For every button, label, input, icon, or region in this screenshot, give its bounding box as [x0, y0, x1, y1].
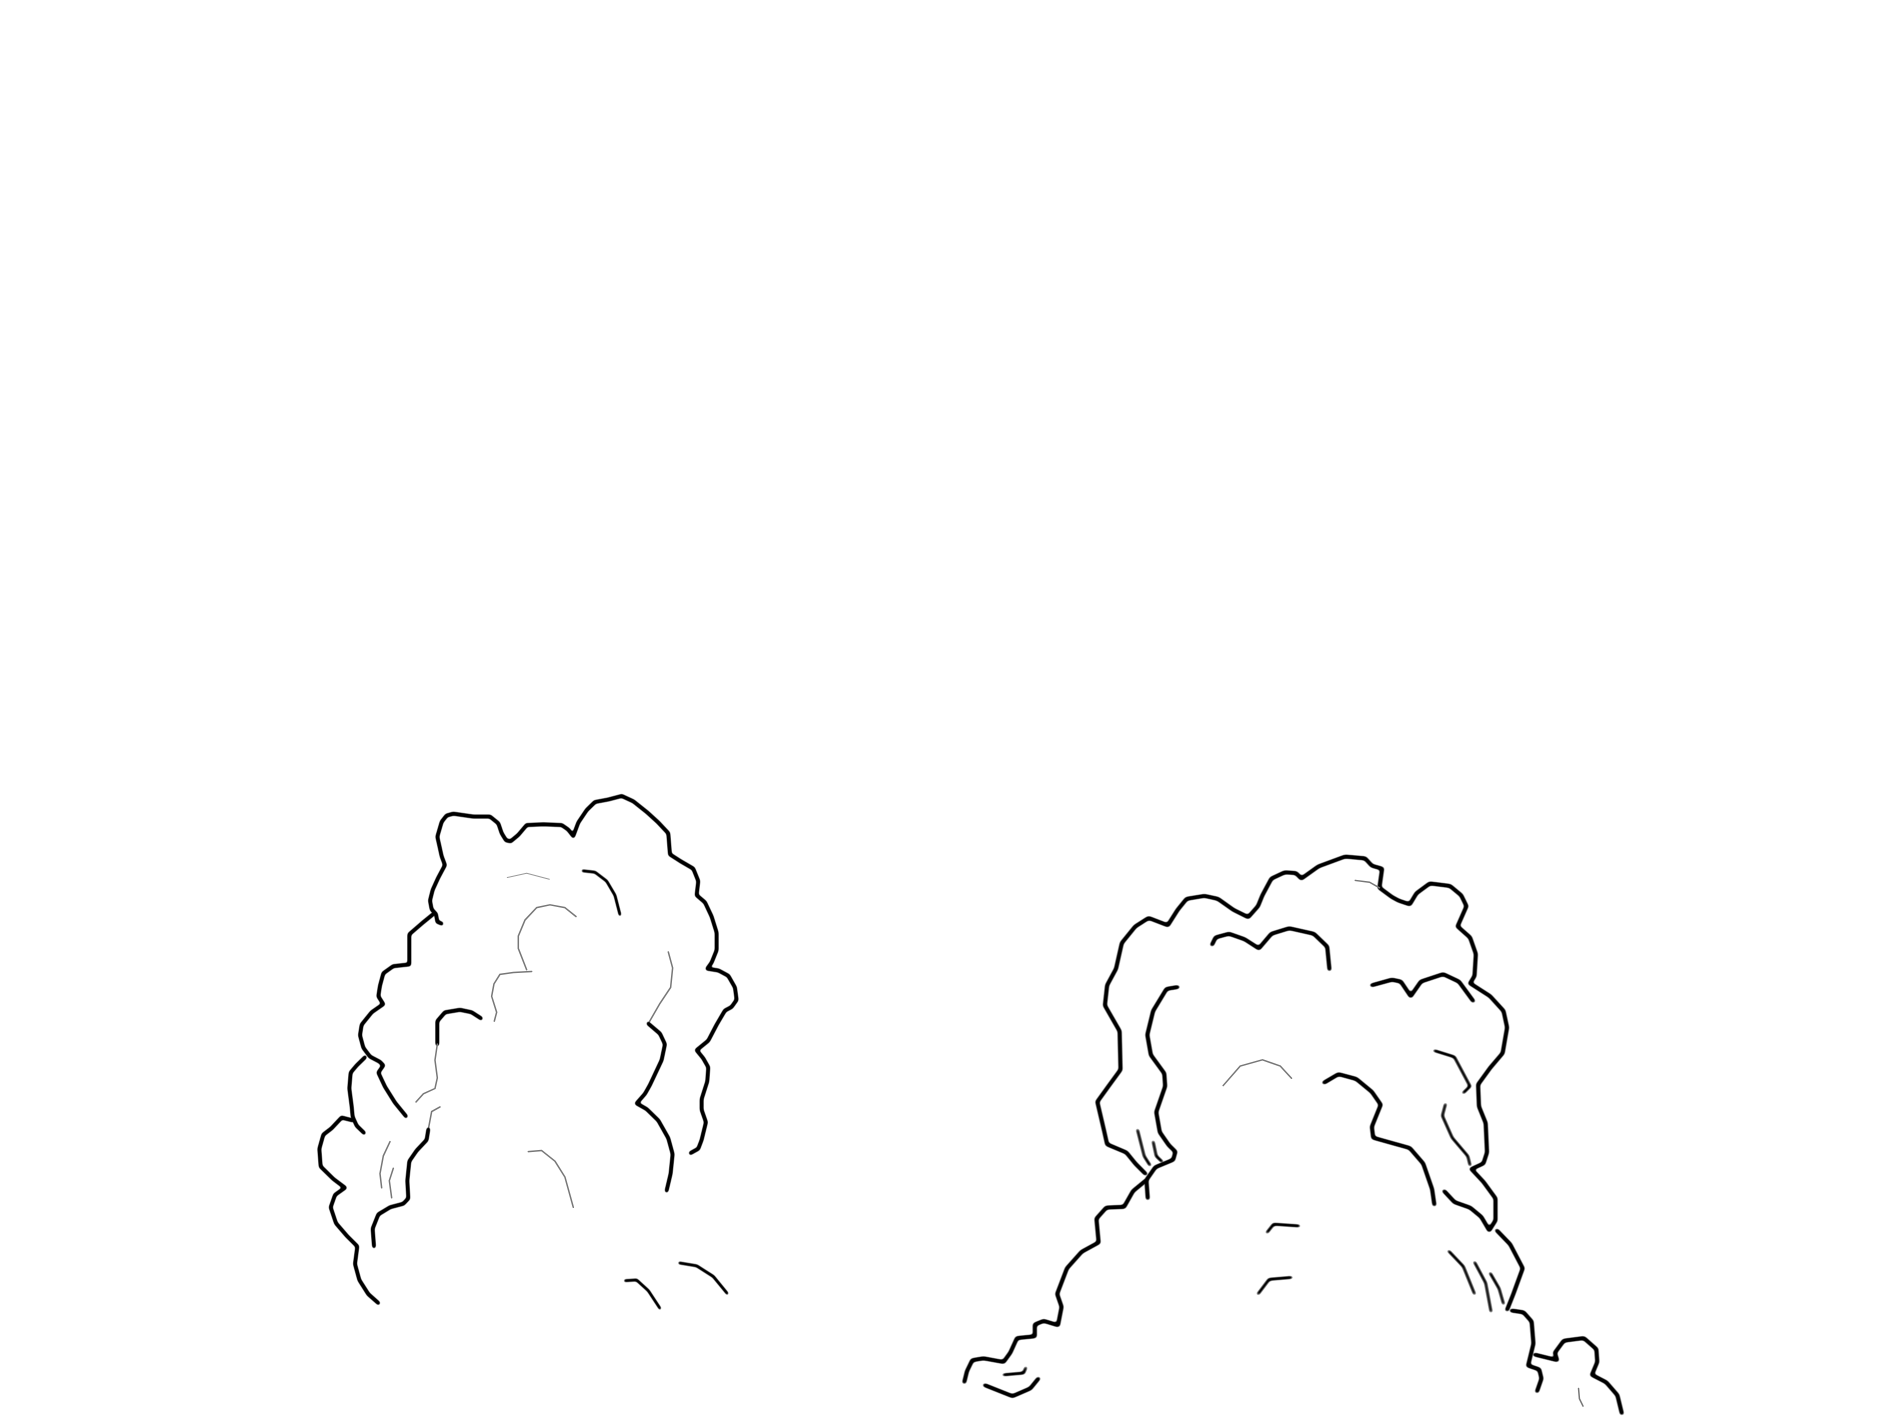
right cloud: right slope	[1497, 1230, 1523, 1310]
left cloud: top faint arc	[507, 873, 549, 879]
left cloud: bottom arcs	[625, 1263, 727, 1308]
right cloud: inner left fold	[1146, 987, 1178, 1198]
left cloud: top right arc	[583, 871, 620, 915]
right cloud: small puff	[1535, 1338, 1622, 1413]
right cloud: base stroke	[985, 1379, 1038, 1396]
left cloud: inner billow	[437, 1010, 481, 1044]
right cloud: small top and puff strokes	[1355, 880, 1583, 1406]
left cloud: upper outline	[430, 796, 737, 1153]
right cloud: base wisp	[1004, 1368, 1026, 1375]
left cloud: central billow arc	[492, 905, 576, 1021]
left cloud: side lobe	[349, 1057, 365, 1133]
right cloud: main outline	[1097, 857, 1507, 1230]
right cloud: centre small arcs	[1258, 1224, 1299, 1294]
left cloud: shading hairlines	[380, 1142, 393, 1198]
left cloud: left shoulder outline	[360, 914, 433, 1116]
right cloud: lower right hairlines	[1449, 1251, 1504, 1312]
right cloud: right billow	[1372, 974, 1473, 1001]
left cloud: inner fold top	[428, 1107, 440, 1129]
right cloud: upper inner billow	[1212, 928, 1329, 969]
right cloud: crease hairlines	[1137, 1130, 1162, 1165]
right cloud: faint centre arc	[1223, 1060, 1291, 1086]
left cloud: lower left outline	[319, 1118, 378, 1303]
right cloud drawing	[964, 857, 1622, 1413]
left cloud: right inner fold faint	[648, 952, 673, 1024]
left cloud: right inner fold	[637, 1024, 673, 1191]
left cloud drawing	[319, 796, 737, 1308]
left cloud: inner billow tail	[416, 1044, 437, 1102]
right cloud: right inner arcs	[1434, 1051, 1470, 1165]
right cloud: central fold	[1324, 1074, 1434, 1205]
left cloud: inner fold lower	[373, 1129, 428, 1246]
left cloud: centre arc	[528, 1151, 573, 1207]
right cloud: lower right step	[1512, 1311, 1541, 1391]
right cloud: lower left slope	[964, 1180, 1146, 1382]
